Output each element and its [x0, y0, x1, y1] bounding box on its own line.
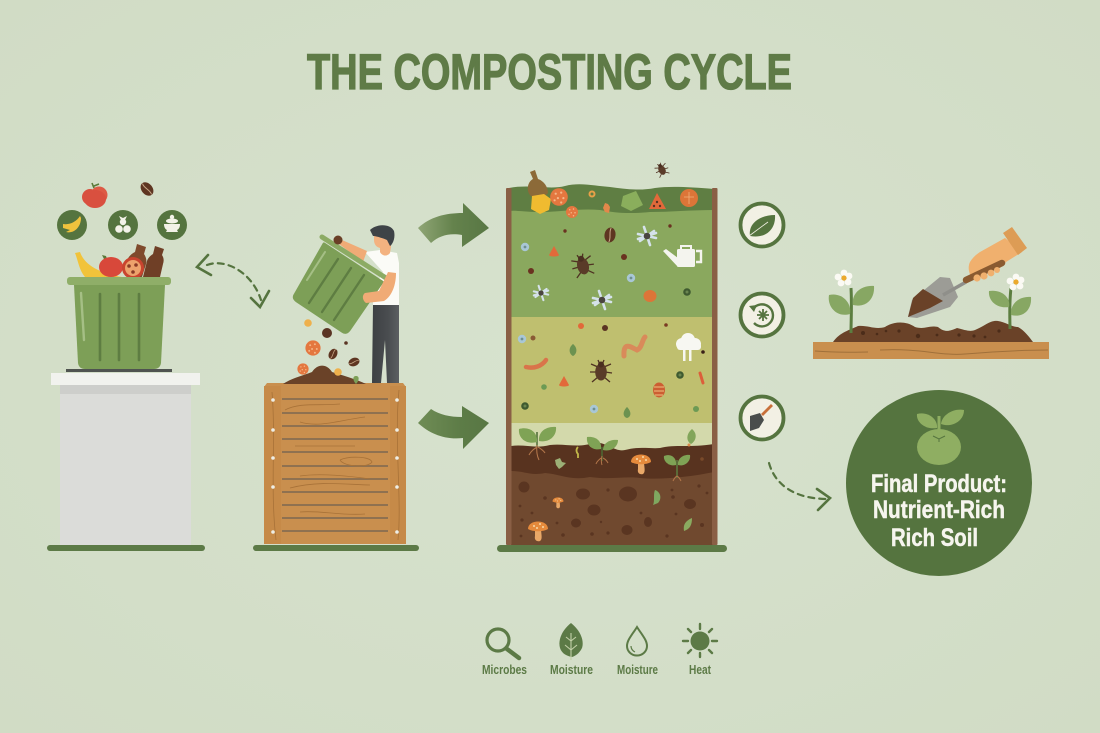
layer: dark soil: [511, 442, 714, 480]
icon: falling apple: [82, 183, 108, 208]
icon: white sheep cloud: [676, 333, 701, 361]
legend: microbes: [482, 629, 527, 677]
dashed double arrow: [197, 255, 269, 307]
base strip: [497, 545, 727, 552]
badge text: Rich Soil: [891, 524, 978, 552]
badge text: Final Product:: [871, 470, 1007, 498]
flower left: [829, 270, 874, 333]
layer: pale band: [509, 423, 714, 453]
top scraps: [528, 161, 698, 218]
stage 1: kitchen scraps bin on counter: [47, 180, 205, 551]
legend: [482, 623, 717, 677]
icon: leaf badge: [740, 204, 784, 246]
organisms and items in yellow layer: [518, 323, 705, 418]
layer: yellow green: [509, 317, 714, 423]
dashed arrow to final product: [769, 463, 830, 510]
compost mound and falling scraps: [283, 319, 366, 384]
legend: moisture leaf: Moisture: [550, 662, 593, 677]
stage 4: trowel adding soil to garden bed: [813, 227, 1049, 359]
icon: cycle badge: [740, 294, 784, 336]
icon: bowl badge: [157, 210, 187, 240]
icon: tomato with leaves: [917, 410, 964, 465]
wooden posts: [506, 188, 718, 545]
process arrow upper: [418, 203, 489, 247]
badge text: [871, 470, 1007, 552]
icon: banana badge: [57, 210, 87, 240]
icon: trowel badge: [740, 396, 784, 440]
layer: fresh scraps top: [509, 184, 714, 213]
counter: [47, 373, 205, 551]
stage 3: compost layers cross-section: [497, 161, 727, 552]
legend: microbes: Microbes: [482, 662, 527, 677]
person: [339, 225, 399, 383]
tipping green bin: [294, 237, 386, 332]
person forearm over bin: [334, 236, 396, 303]
organisms and items in green layer: [521, 224, 701, 309]
title: THE COMPOSTING CYCLE: [307, 44, 792, 100]
garden bed board: [813, 342, 1049, 359]
trowel: [908, 277, 966, 318]
legend: heat: [683, 624, 717, 677]
legend: moisture drop: Moisture: [617, 662, 658, 677]
icon: coffee bean: [138, 180, 156, 198]
legend: moisture leaf: [550, 623, 593, 677]
scraps in bin: [75, 244, 164, 279]
legend: heat: Heat: [689, 662, 712, 677]
seedlings and fungi in soil: [519, 427, 704, 541]
stage 2: person tipping bin into wooden box: [253, 225, 419, 551]
badge text: Nutrient-Rich: [873, 496, 1005, 524]
layer: brown soil: [511, 471, 714, 545]
layer: green: [509, 205, 714, 317]
soil clods: [518, 482, 708, 538]
legend: moisture drop: [617, 627, 658, 677]
soil mound: [833, 321, 1033, 342]
icon: watering can: [663, 246, 701, 267]
wooden compost box: [253, 383, 419, 551]
process arrow lower: [418, 406, 489, 449]
final product badge: [846, 390, 1032, 576]
icon: fruit badge: [108, 210, 138, 240]
flower right: [989, 274, 1031, 329]
gardening hand and cuff: [966, 227, 1027, 282]
green bin: [66, 277, 172, 372]
